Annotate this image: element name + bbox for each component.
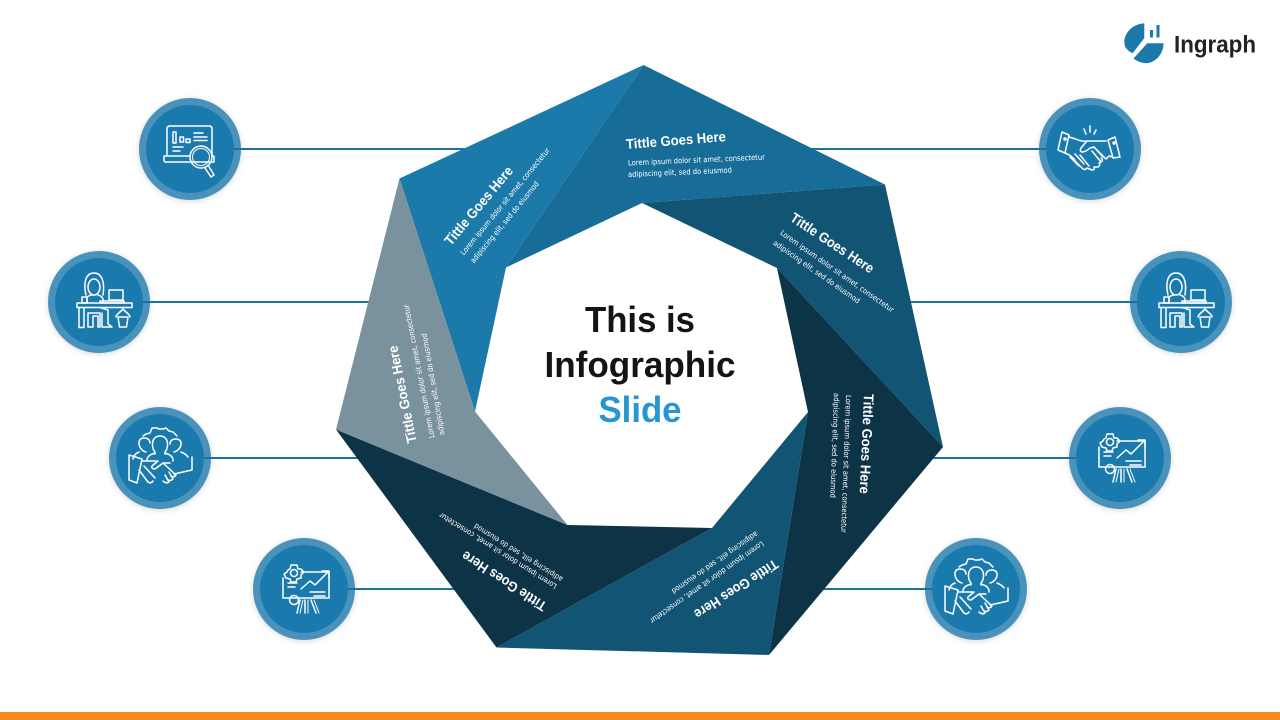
panel 1 body line 2: adipiscing elit, sed do eiusmod [469,179,541,265]
icon circle: presentation chart left [253,538,355,640]
panel 4 body line 2: adipiscing elit, sed do eiusmod [828,393,841,498]
panel 1 body line 1: Lorem ipsum dolor sit amet, consectetur [459,145,552,257]
panel 3 body line 1: Lorem ipsum dolor sit amet, consectetur [778,228,896,315]
centre title: Infographic [544,344,736,385]
panel 1 title: Tittle Goes Here [441,163,516,248]
icon circle: team handshake right [925,538,1027,640]
icon circle: team handshake left [109,407,211,509]
centre title: Slide [598,389,682,430]
centre title [544,299,736,430]
panel 5 body line 1: Lorem ipsum dolor sit amet, consectetur [648,539,766,626]
panel 3 title: Tittle Goes Here [788,209,877,276]
panel 3 body line 2: adipiscing elit, sed do eiusmod [771,238,862,305]
panel 6 body line 1: Lorem ipsum dolor sit amet, consectetur [437,510,558,591]
panel 2 body line 2: adipiscing elit, sed do eiusmod [628,165,732,179]
panel 7 body line 1: Lorem ipsum dolor sit amet, consectetur [401,303,436,439]
panel 5: dark teal [496,412,808,655]
panel 2 title: Tittle Goes Here [625,128,727,152]
panel 6 body line 2: adipiscing elit, sed do eiusmod [472,522,564,584]
icon circle: presentation chart right [1069,407,1171,509]
panel 3: dark teal [642,184,943,447]
logo: Ingraph [1124,23,1256,63]
connector lines [143,149,1137,589]
panel 4 title: Tittle Goes Here [857,394,877,494]
panel 5 title: Tittle Goes Here [691,556,781,623]
panel 7 title: Tittle Goes Here [384,344,420,445]
panel 6: navy [336,430,712,648]
icon circle: handshake right [1039,98,1141,200]
panel 2 body line 1: Lorem ipsum dolor sit amet, consectetur [628,152,766,167]
panel 6 title: Tittle Goes Here [458,548,549,615]
panel 2: medium blue [506,65,885,268]
icon circle: laptop analysis [139,98,241,200]
panel 5 body line 2: adipiscing elit, sed do eiusmod [670,529,760,596]
panel 7: grey [336,178,568,525]
panel 4 body line 1: Lorem ipsum dolor sit amet, consectetur [839,395,853,534]
panel 1: blue [400,65,644,412]
bottom orange bar [0,712,1280,720]
logo icon [1124,23,1164,63]
icon circle: person at desk left [48,251,150,353]
panel 7 body line 2: adipiscing elit, sed do eiusmod [420,333,446,436]
icon circle: person at desk right [1130,251,1232,353]
panel 4: navy [769,268,943,655]
logo wordmark: Ingraph [1174,32,1256,58]
centre title: This is [585,299,695,340]
